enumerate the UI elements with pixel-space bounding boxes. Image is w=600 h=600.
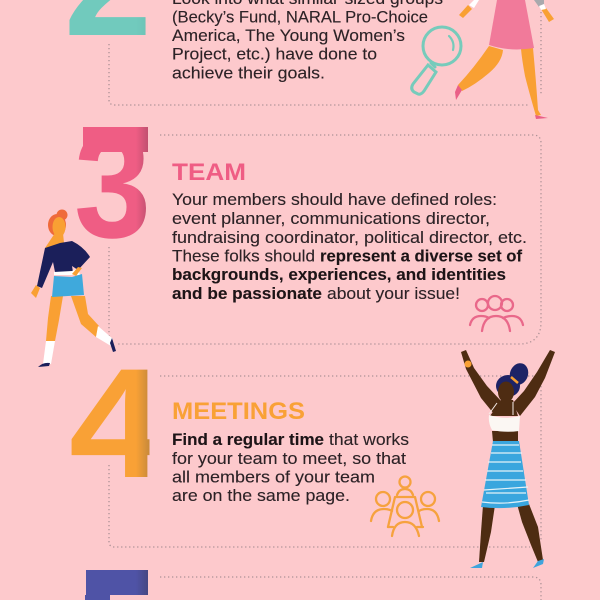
text block: research: achieve their goals. — [172, 64, 325, 82]
text block: team: Your members should have defined roles: — [172, 190, 497, 209]
number 4: 4 — [69, 337, 164, 511]
text block: research: America, The Young Women’s — [172, 26, 405, 45]
text block: team: fundraising coordinator, political director, etc. — [172, 228, 527, 247]
icon: magnifying glass — [412, 27, 461, 94]
text block: meetings: all members of your team — [172, 468, 375, 486]
text block: meetings: Find a regular time — [172, 430, 324, 449]
text block: meetings — [172, 430, 409, 505]
text block: team: These folks should — [172, 246, 315, 266]
text block: research: Project, etc.) have done to — [172, 44, 377, 64]
text block: research — [172, 0, 443, 82]
text block: team — [172, 190, 527, 303]
heading: team: TEAM — [172, 159, 246, 186]
text block: team: about your issue! — [327, 284, 460, 303]
heading: meetings: MEETINGS — [172, 398, 305, 425]
text block: team: represent a diverse set of — [320, 246, 522, 266]
illustration: woman in pink skirt — [455, 0, 554, 119]
text block: meetings: are on the same page. — [172, 486, 350, 505]
text block: research: (Becky’s Fund, NARAL Pro-Choice — [172, 8, 428, 26]
icon: meeting table — [371, 476, 439, 536]
text block: team: event planner, communications director, — [172, 209, 490, 228]
number 3: 3 — [74, 100, 151, 270]
illustration: woman with raised arms — [461, 350, 555, 568]
text block: team: and be passionate — [172, 284, 322, 303]
text block: meetings: for your team to meet, so that — [172, 449, 406, 468]
icon: team of people — [470, 296, 523, 331]
text block: meetings: that works — [329, 430, 409, 449]
text block: team: backgrounds, experiences, and identities — [172, 265, 506, 284]
illustration: woman in blue skirt — [31, 210, 116, 367]
